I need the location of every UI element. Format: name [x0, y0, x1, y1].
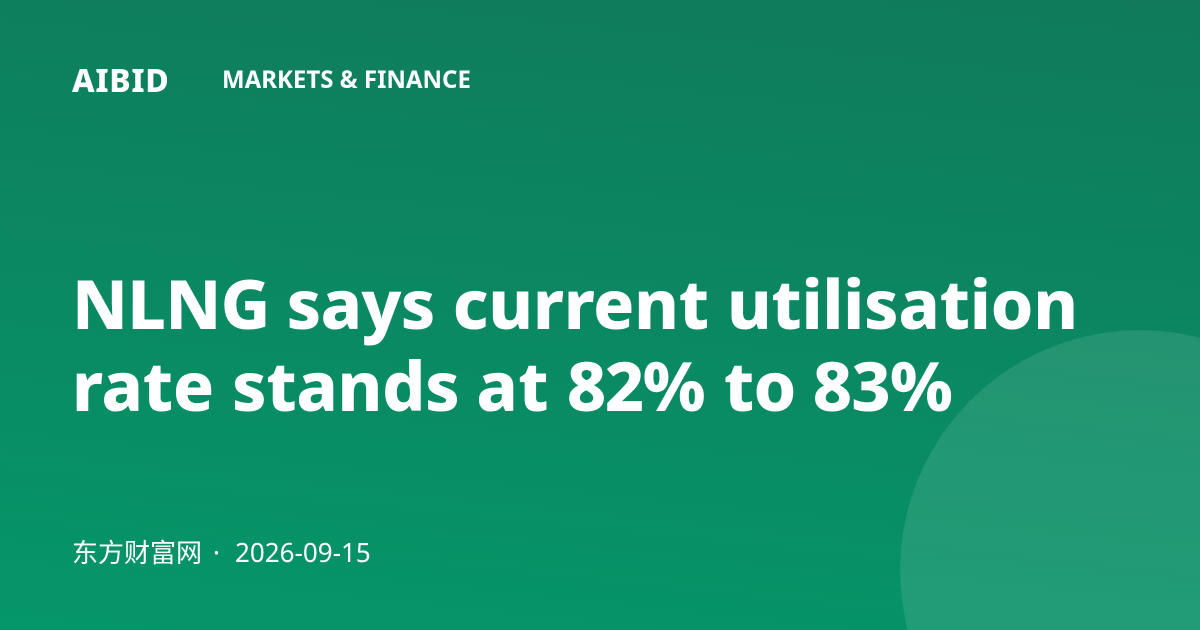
headline: NLNG says current utilisation	[72, 256, 1078, 349]
decorative circle	[900, 330, 1200, 630]
headline: rate stands at 82% to 83%	[72, 338, 952, 431]
headline	[72, 256, 1078, 431]
category label: MARKETS & FINANCE	[222, 63, 471, 96]
source and date: 东方财富网 · 2026-09-15	[72, 534, 371, 570]
brand: AIBID: AIBID	[72, 59, 169, 102]
